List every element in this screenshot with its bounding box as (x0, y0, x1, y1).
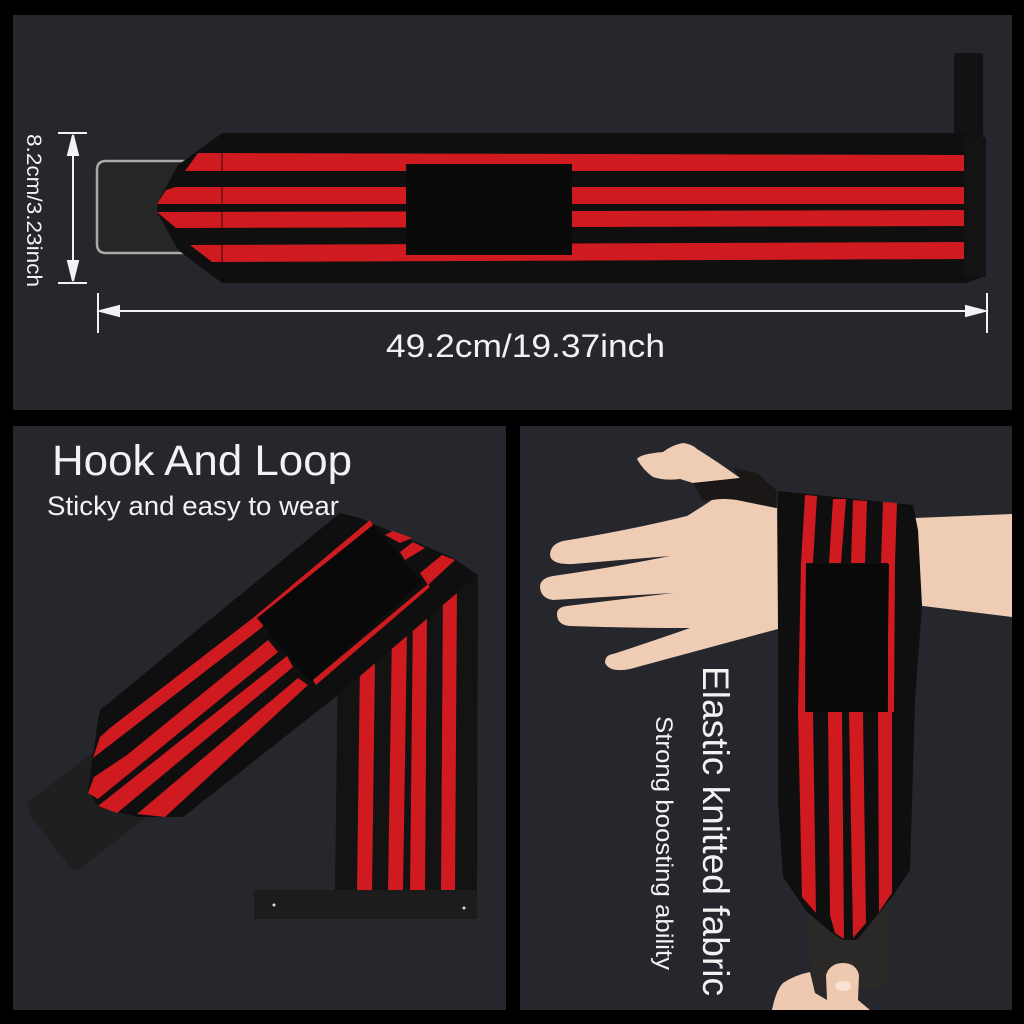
width dimension arrow (98, 293, 987, 333)
diagonal section of wrap (88, 513, 478, 817)
forearm (915, 514, 1012, 617)
height dimension text: 8.2cm/3.23inch (22, 134, 45, 287)
panel: hook and loop (13, 426, 506, 1010)
icon: metal loop buckle (97, 161, 195, 253)
icon: hand (540, 443, 778, 670)
thumb loop (954, 53, 983, 143)
wrist wrap (778, 491, 922, 940)
red stripes (157, 153, 968, 262)
bottom strap (254, 890, 477, 919)
wrist wrap (157, 133, 986, 283)
thumb strap (693, 468, 777, 508)
velcro patch (406, 164, 572, 255)
subheading, rotated: Strong boosting ability (650, 716, 677, 970)
vertical section of wrap (335, 575, 478, 892)
heading, rotated: Elastic knitted fabric (695, 666, 736, 996)
red stripes (88, 520, 455, 817)
panel: elastic knitted fabric (520, 426, 1012, 1010)
lower tab (807, 900, 890, 993)
end flap (964, 137, 986, 277)
red stripes (798, 495, 897, 939)
velcro patch (257, 525, 422, 682)
heading: Hook And Loop (52, 437, 352, 485)
black tab end (27, 753, 147, 870)
stitching line (221, 135, 223, 283)
fingers holding the tab (772, 963, 870, 1010)
panel: dimensions (13, 15, 1012, 410)
subheading: Sticky and easy to wear (47, 491, 339, 521)
width dimension text: 49.2cm/19.37inch (386, 328, 665, 364)
height dimension arrow (58, 133, 87, 283)
velcro patch (805, 564, 889, 712)
